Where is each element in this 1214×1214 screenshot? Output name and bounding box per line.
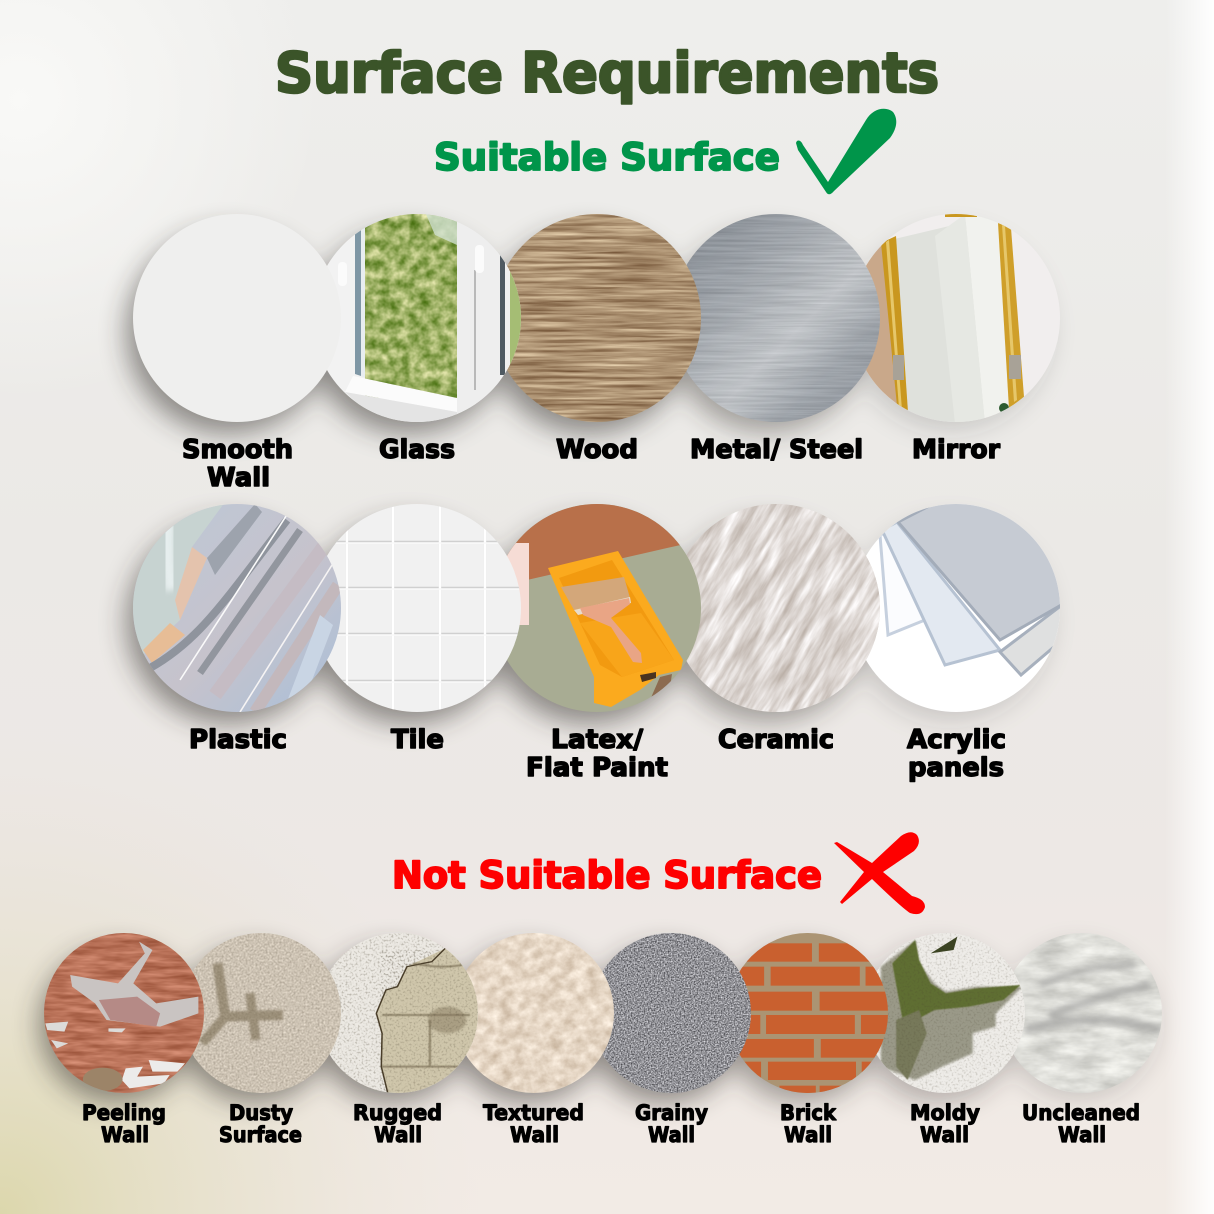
label: Textured Wall: Textured: [483, 1101, 584, 1125]
label: Acrylic panels: panels: [908, 753, 1004, 783]
item: Acrylic panels: [866, 504, 1060, 782]
photo: plastic strips: [131, 502, 345, 714]
photo: wood grain: [507, 214, 701, 422]
photo: peeling paint: [42, 931, 206, 1095]
item: Rugged Wall: [330, 933, 478, 1143]
icon: green check mark: [796, 109, 896, 194]
item: Ceramic: [686, 504, 880, 749]
label: Textured Wall: [483, 1101, 584, 1147]
photo: grainy wall: [602, 933, 751, 1093]
panel: suitable surfaces row 2: [131, 409, 1070, 807]
label: Brick Wall: Wall: [784, 1123, 832, 1147]
photo: rugged wall: [330, 933, 478, 1093]
label: Tile: Tile: [391, 725, 444, 755]
label: Acrylic panels: Acrylic: [907, 725, 1006, 755]
label: Metal/ Steel: Metal/ Steel: [690, 435, 863, 465]
label: Smooth Wall: Wall: [207, 463, 270, 493]
item: Plastic: [131, 502, 345, 755]
photo: mirror: [866, 214, 1060, 422]
label: Rugged Wall: Rugged: [353, 1101, 442, 1125]
item: Latex/ Flat Paint: [507, 504, 701, 777]
label: Grainy Wall: [635, 1101, 708, 1147]
item: Brick Wall: [740, 933, 888, 1143]
label: Acrylic panels: [907, 725, 1006, 783]
label: Smooth Wall: [182, 435, 293, 493]
photo: paint tray and brush: [507, 504, 701, 712]
photo: moldy wall: [876, 933, 1025, 1093]
photo: brushed metal: [686, 214, 880, 422]
label: Textured Wall: Wall: [510, 1123, 559, 1147]
label: Uncleaned Wall: [1022, 1101, 1140, 1147]
label: Smooth Wall: Smooth: [182, 435, 293, 465]
panel: not suitable surfaces: [42, 931, 1164, 1147]
label: Rugged Wall: [353, 1101, 442, 1147]
photo: acrylic sheets: [866, 504, 1060, 712]
item: Smooth Wall: [133, 214, 341, 493]
photo: white tiles: [327, 504, 521, 712]
item: Peeling Wall: [42, 931, 206, 1147]
label: Uncleaned Wall: Wall: [1058, 1123, 1106, 1147]
label: Glass: Glass: [379, 435, 455, 465]
label: Grainy Wall: Wall: [648, 1123, 695, 1147]
label: Brick Wall: Brick: [780, 1101, 837, 1125]
label: Mirror: Mirror: [912, 435, 1000, 465]
photo: uncleaned wall: [1014, 933, 1162, 1092]
item: Uncleaned Wall: [1014, 933, 1162, 1143]
photo: marble ceramic: [686, 504, 880, 712]
label: Plastic: Plastic: [189, 725, 287, 755]
label: Ceramic: Ceramic: [718, 725, 834, 755]
label: Uncleaned Wall: Uncleaned: [1022, 1101, 1140, 1125]
item: Textured Wall: [466, 933, 614, 1143]
label: Grainy Wall: Grainy: [635, 1101, 708, 1125]
label: Latex/ Flat Paint: Flat Paint: [526, 753, 668, 783]
photo: textured wall: [466, 933, 614, 1093]
panel: suitable surfaces row 1: [133, 212, 1062, 493]
label: Dusty Surface: Dusty: [229, 1101, 293, 1125]
label: Dusty Surface: [219, 1101, 302, 1147]
icon: brush: [561, 577, 642, 663]
photo: window: [327, 214, 521, 422]
label: Brick Wall: [780, 1101, 837, 1147]
item: Tile: [327, 504, 521, 749]
icon: tray: [548, 551, 683, 707]
label: Dusty Surface: Surface: [219, 1123, 302, 1147]
label: Peeling Wall: Wall: [101, 1123, 149, 1147]
heading: not suitable surface: Not Suitable Surface: [392, 854, 822, 897]
label: Moldy Wall: [910, 1101, 980, 1147]
photo: dusty surface: [192, 933, 341, 1093]
item: Dusty Surface: [192, 933, 341, 1143]
photo: smooth wall: [133, 214, 341, 422]
item: Grainy Wall: [602, 933, 751, 1143]
label: Rugged Wall: Wall: [374, 1123, 422, 1147]
item: Wood: [507, 214, 701, 459]
item: Glass: [327, 214, 521, 459]
photo: brick wall: [740, 933, 888, 1093]
label: Wood: Wood: [556, 435, 638, 465]
item: Metal/ Steel: [686, 214, 880, 461]
icon: red cross: [834, 832, 925, 914]
label: Latex/ Flat Paint: [526, 725, 668, 783]
label: Peeling Wall: [82, 1101, 166, 1147]
title: Surface Requirements: [275, 41, 939, 105]
item: Mirror: [866, 214, 1060, 459]
heading: suitable surface: Suitable Surface: [434, 136, 780, 179]
label: Moldy Wall: Moldy: [910, 1101, 980, 1125]
item: Moldy Wall: [876, 933, 1025, 1143]
label: Peeling Wall: Peeling: [82, 1101, 166, 1125]
label: Moldy Wall: Wall: [920, 1123, 969, 1147]
label: Latex/ Flat Paint: Latex/: [551, 725, 644, 755]
